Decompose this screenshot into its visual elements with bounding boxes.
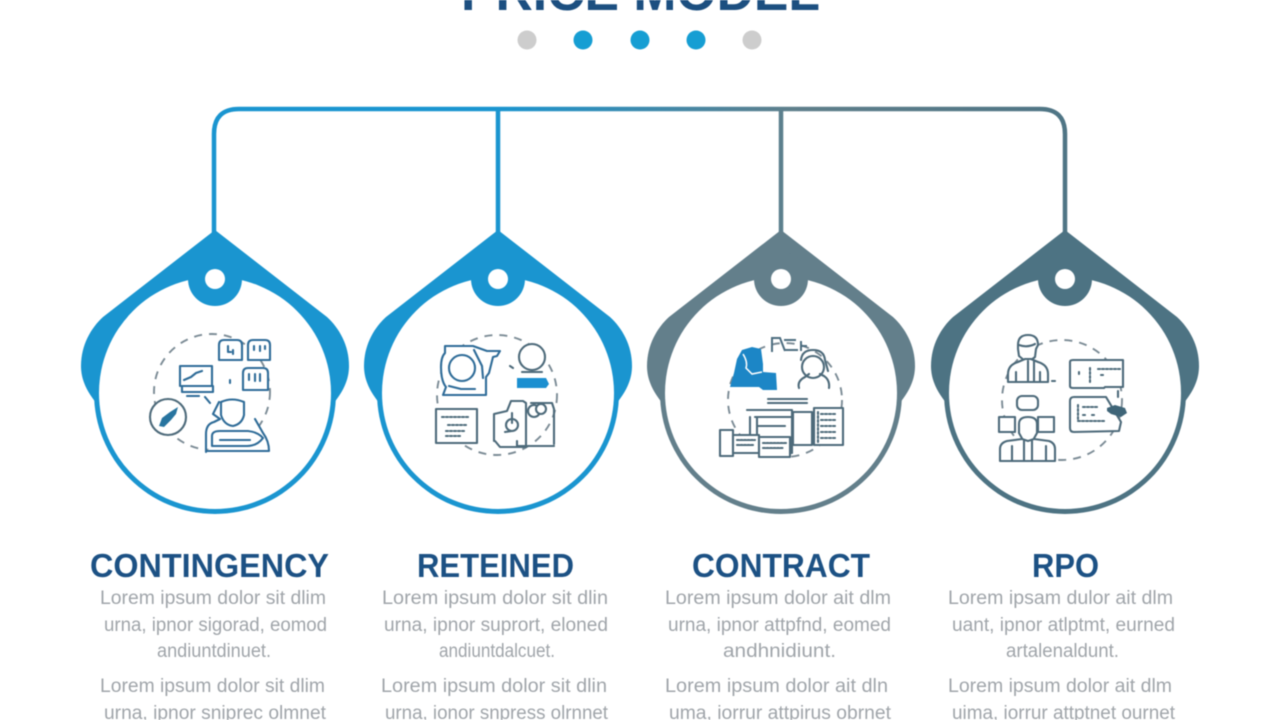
- column: contract: urna, ipnor attpfnd, eomed: [668, 615, 891, 636]
- column: rpo: Lorem ipsum dolor ait dlm: [948, 676, 1172, 697]
- column: contingency: Lorem ipsum dolor sit dlim: [100, 588, 326, 609]
- column: contingency: urna, ipnor sigorad, eomod: [104, 615, 327, 636]
- column: reteined: urna, ipnor suprort, eloned: [384, 615, 608, 636]
- column: contingency: CONTINGENCY: [90, 547, 329, 584]
- column: contract: [665, 547, 892, 720]
- icon: rpo: [999, 335, 1127, 461]
- column: contingency: andiuntdinuet.: [157, 641, 271, 662]
- tag: rpo: [931, 230, 1199, 514]
- tag: contract: [647, 230, 915, 514]
- column: contract: CONTRACT: [692, 547, 870, 584]
- icon: retained: [436, 335, 557, 455]
- column: reteined: Lorem ipsum dolor sit dlin: [381, 676, 607, 697]
- column: rpo: uant, ipnor atlptmt, eurned: [952, 615, 1175, 636]
- tag: retained: [364, 230, 632, 514]
- column: reteined: andiuntdalcuet.: [439, 641, 555, 662]
- connector lines: [214, 109, 1065, 234]
- column: rpo: artalenaldunt.: [1006, 641, 1119, 662]
- column: rpo: [948, 547, 1176, 720]
- column: reteined: Lorem ipsum dolor sit dlin: [382, 588, 608, 609]
- column: reteined: RETEINED: [417, 547, 574, 584]
- title dots: [518, 30, 762, 50]
- tag: contingency: [81, 230, 349, 514]
- column: reteined: [381, 547, 609, 720]
- column: contract: Lorem ipsum dolor ait dln: [665, 676, 888, 697]
- column: rpo: RPO: [1032, 547, 1099, 584]
- column: contract: Lorem ipsum dolor ait dlm: [665, 588, 891, 609]
- icon: contingency: [150, 334, 270, 452]
- column: rpo: Lorem ipsam dulor ait dlm: [948, 588, 1173, 609]
- column: contingency: Lorem ipsum dolor sit dlim: [100, 676, 325, 697]
- column: contract: andhnidiunt.: [723, 641, 836, 662]
- icon: contract: [720, 338, 843, 457]
- column: contingency: [90, 547, 329, 720]
